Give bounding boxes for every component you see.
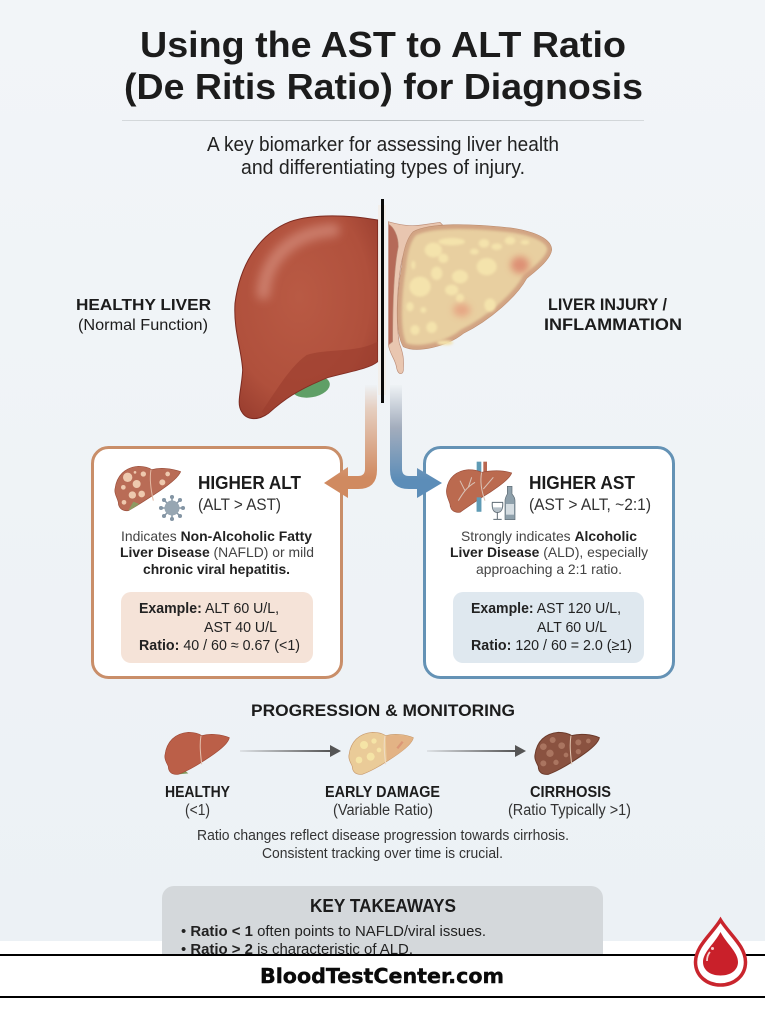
illustration: injured liver half [388,222,552,374]
heading: progression and monitoring: PROGRESSION & MONITORING [251,701,515,720]
label: healthy liver [76,297,211,334]
title: (De Ritis Ratio) for Diagnosis [124,66,643,107]
stage label: cirrhosis: CIRRHOSIS [530,784,611,801]
heading: higher AST: HIGHER AST [529,473,635,493]
stage label: cirrhosis [508,784,631,819]
icon: liver with vessels and alcohol [446,462,515,520]
icon: healthy liver small [165,732,229,774]
example box: ALT: Ratio: 40 / 60 ≈ 0.67 (<1) [139,638,300,654]
description: AST: approaching a 2:1 ratio. [476,561,622,577]
description: ALT [120,528,314,577]
label: healthy liver: HEALTHY LIVER [76,297,211,314]
description: ALT: chronic viral hepatitis. [143,561,290,577]
example box: AST: Ratio: 120 / 60 = 2.0 (≥1) [471,638,632,654]
panel: key takeaways: KEY TAKEAWAYS [310,896,456,916]
arrow: healthy to early damage [240,745,341,757]
example box: AST [453,592,644,663]
progression note: Ratio changes reflect disease progression towards cirrhosis. [197,827,569,844]
stage label: healthy: (<1) [185,802,210,819]
progression note [197,827,569,862]
description: AST: Liver Disease (ALD), especially [450,544,648,560]
example box: AST: ALT 60 U/L [537,620,607,636]
panel: higher AST [424,448,674,678]
label: healthy liver: (Normal Function) [78,317,208,334]
footer band [0,954,765,998]
description: ALT: Indicates Non-Alcoholic Fatty [121,528,312,544]
icon: cirrhosis liver small [535,732,599,774]
description: AST: Strongly indicates Alcoholic [461,528,637,544]
arrow: early damage to cirrhosis [427,745,526,757]
arrow: to higher ALT [324,385,377,498]
label: liver injury [544,295,682,334]
title: Using the AST to ALT Ratio [140,24,626,65]
divider line between livers [378,199,386,403]
stage label: cirrhosis: (Ratio Typically >1) [508,802,631,819]
example box: ALT [121,592,313,663]
example box: ALT: AST 40 U/L [204,620,277,636]
subtitle: A key biomarker for assessing liver health [207,134,559,156]
icon: fatty liver with virus [115,466,184,520]
stage label: healthy [165,784,231,819]
panel: key takeaways [162,886,603,954]
description: ALT: Liver Disease (NAFLD) or mild [120,544,314,560]
example box: AST: Example: AST 120 U/L, [471,601,621,617]
panel: higher ALT [92,448,342,678]
title [124,24,643,107]
label: liver injury: INFLAMMATION [544,315,682,334]
panel: higher AST: (AST > ALT, ~2:1) [529,495,651,514]
panel: key takeaways: • Ratio > 2 is characteristic of ALD. [181,941,413,958]
label: liver injury: LIVER INJURY / [548,295,667,314]
subtitle: and differentiating types of injury. [241,157,525,179]
footer brand text: BloodTestCenter.com [260,964,504,988]
subtitle [207,134,559,179]
progression note: Consistent tracking over time is crucial. [262,845,503,862]
description: AST [450,528,648,577]
panel: higher ALT: (ALT > AST) [198,495,281,514]
example box: ALT: Example: ALT 60 U/L, [139,601,279,617]
illustration: healthy liver half [235,216,378,419]
stage label: healthy: HEALTHY [165,784,231,801]
stage label: early damage [325,784,440,819]
stage label: early damage: (Variable Ratio) [333,802,433,819]
stage label: early damage: EARLY DAMAGE [325,784,440,801]
icon: blood drop logo [696,920,746,985]
arrow: to higher AST [390,385,442,498]
heading: higher ALT: HIGHER ALT [198,473,301,493]
icon: early damage liver small [349,732,413,774]
panel: key takeaways: • Ratio < 1 often points to NAFLD/viral issues. [181,923,486,940]
